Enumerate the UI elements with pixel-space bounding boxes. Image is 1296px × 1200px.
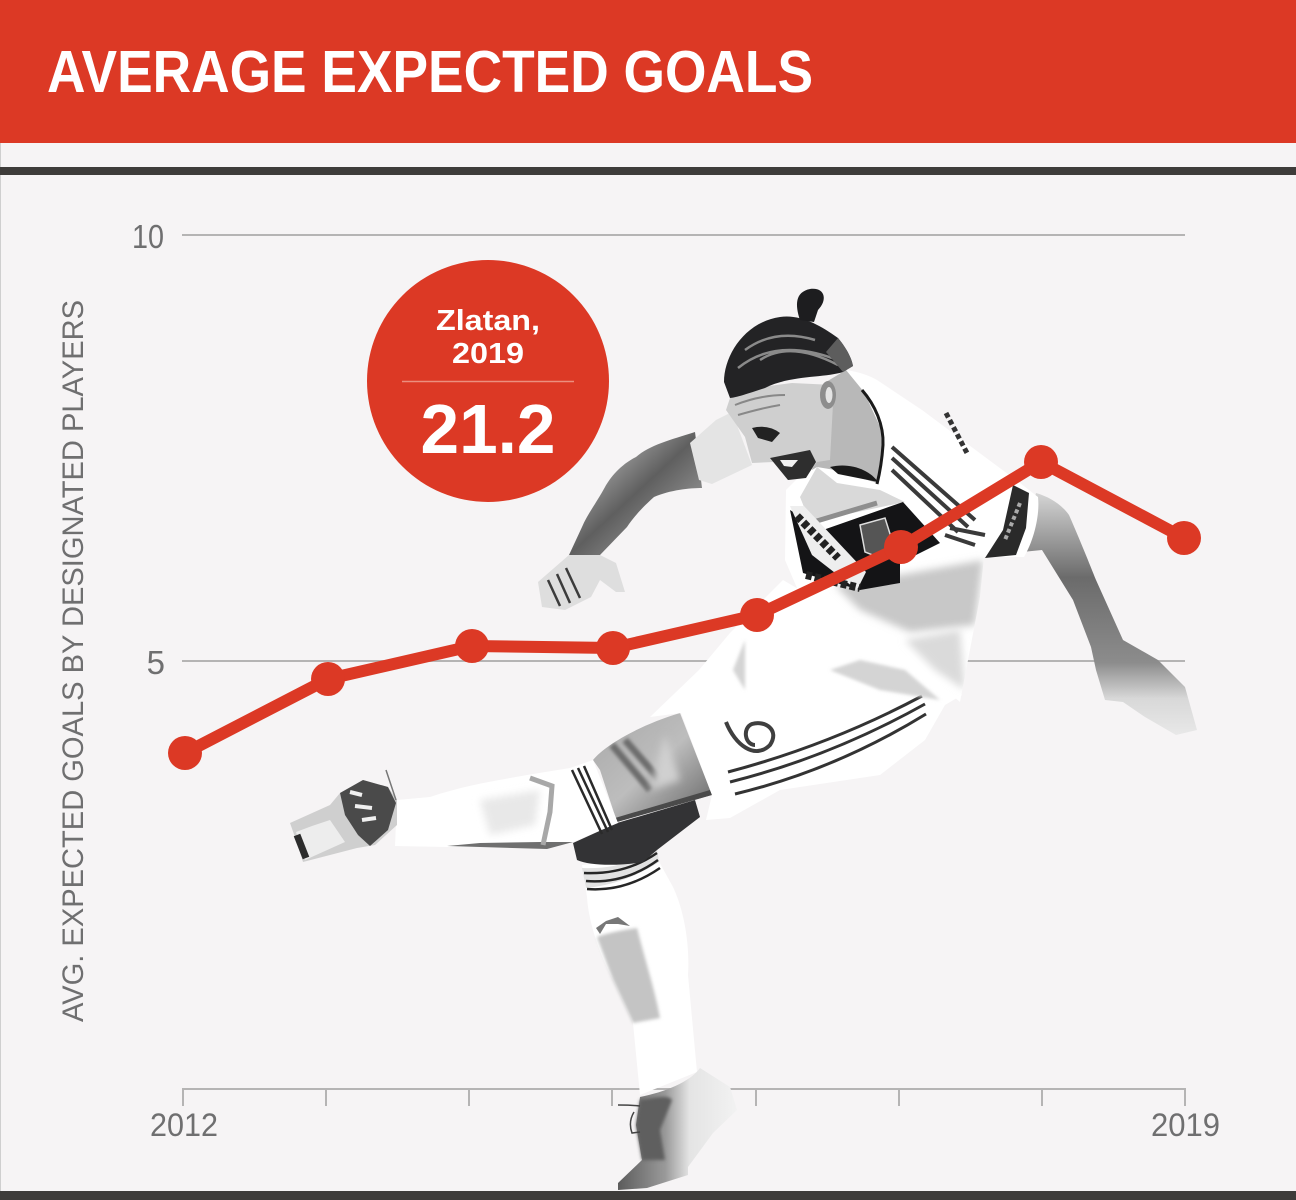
kicking leg sock (395, 760, 618, 849)
bottom divider bar (0, 1191, 1296, 1200)
jersey shoulder stripes (892, 447, 985, 545)
standing boot (618, 1068, 737, 1190)
left arm and fist (538, 432, 702, 610)
y axis gridlines and labels (132, 218, 1185, 681)
header band (0, 0, 1296, 143)
right arm (1022, 493, 1197, 735)
callout: Zlatan 2019: 2019 (452, 338, 524, 370)
y axis gridlines and labels: 10 (132, 218, 164, 255)
jersey chest panel (790, 502, 940, 590)
armband (985, 485, 1029, 558)
left sleeve (690, 412, 752, 484)
callout: Zlatan 2019 (367, 260, 609, 502)
left edge rule (0, 143, 1, 1191)
jersey (785, 370, 1038, 702)
y axis gridlines and labels: 5 (147, 644, 165, 681)
callout: Zlatan 2019: Zlatan, (436, 305, 540, 337)
callout: Zlatan 2019: 21.2 (420, 390, 556, 468)
x axis with ticks and year labels: 2012 (150, 1107, 218, 1143)
x axis with ticks and year labels: 2019 (1151, 1107, 1220, 1143)
player photo illustration (290, 289, 1197, 1190)
LA crest (860, 518, 892, 558)
undershorts (573, 800, 700, 865)
x axis with ticks and year labels (150, 1089, 1220, 1143)
hair and bun (724, 289, 853, 398)
title: AVERAGE EXPECTED GOALS (47, 39, 813, 105)
sponsor lettering on back (946, 413, 967, 453)
top divider bar (0, 167, 1296, 175)
y axis title: AVG. EXPECTED GOALS BY DESIGNATED PLAYERS (57, 300, 90, 1022)
line chart series (168, 445, 1201, 770)
kicking boot (290, 770, 397, 862)
jersey collar front (800, 467, 905, 522)
face (726, 381, 836, 480)
neck (812, 370, 883, 484)
jersey folds (835, 560, 983, 690)
standing leg (582, 848, 697, 1095)
thigh (593, 713, 712, 824)
shorts (650, 580, 962, 820)
